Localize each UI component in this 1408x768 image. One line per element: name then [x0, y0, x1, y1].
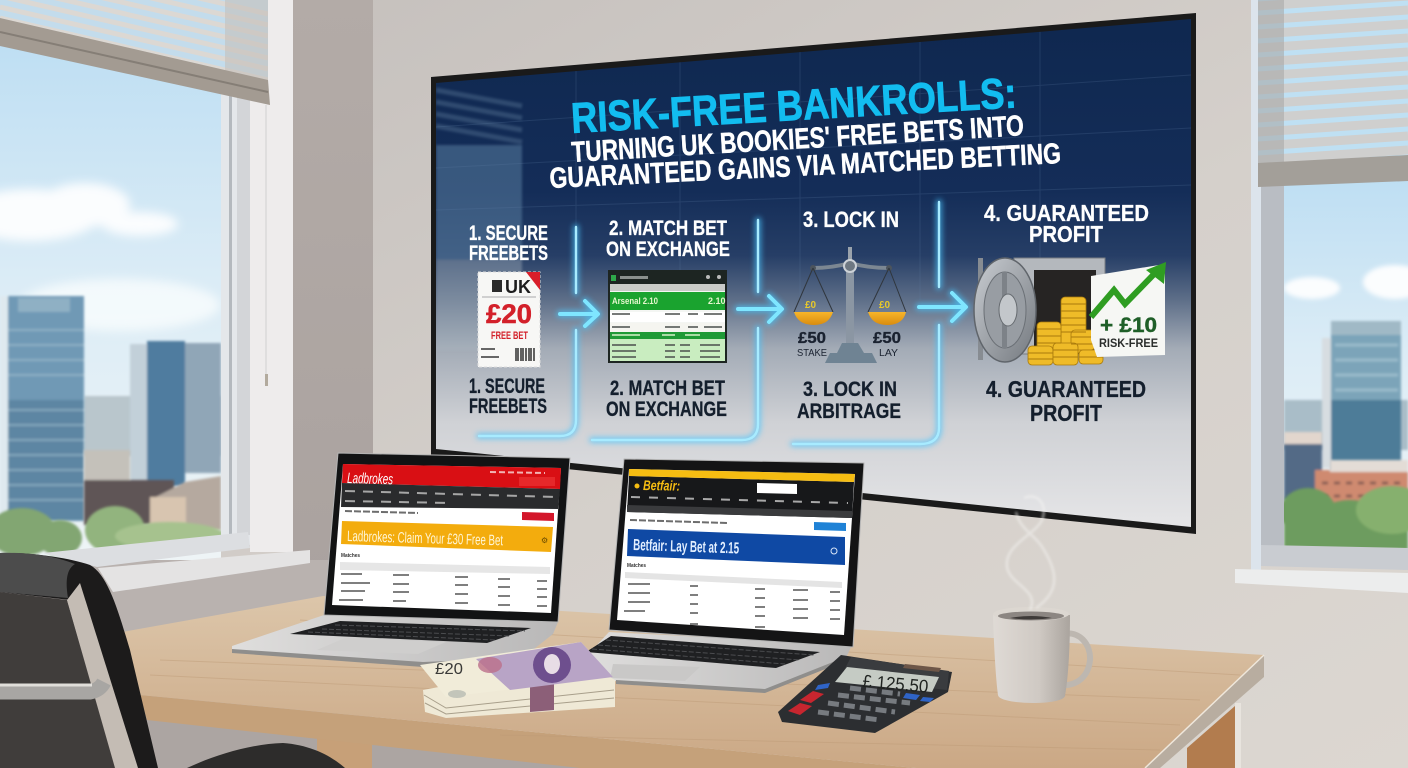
wall below left window: [0, 560, 372, 768]
icon: balance scale: £50: [873, 330, 901, 347]
left laptop: Ladbrokes: Claim Your £30 Free Bet: [347, 528, 504, 549]
icon: safe, coins and profit card: + £10: [1100, 314, 1157, 337]
left laptop: [232, 453, 570, 667]
icon: free bet ticket: £20: [486, 299, 532, 329]
glowing flow lines: [479, 202, 939, 444]
step 1 top label: [469, 222, 548, 265]
desk leg left: [317, 735, 372, 768]
wall screen: [431, 13, 1196, 534]
step 1 bottom label: 1. SECURE: [469, 375, 545, 398]
step 3 bottom label: ARBITRAGE: [797, 400, 901, 423]
clouds right: [1284, 265, 1408, 299]
desk: [100, 596, 1264, 768]
right window: [1251, 0, 1408, 572]
icon: balance scale: LAY: [879, 348, 898, 359]
icon: balance scale: £0: [805, 300, 817, 311]
trees left: [0, 506, 225, 556]
profit card: [1091, 264, 1165, 357]
frame right: [1251, 0, 1261, 572]
right laptop: Betfair:: [643, 477, 680, 494]
left window: [0, 0, 293, 567]
step 2 top label: ON EXCHANGE: [606, 238, 730, 261]
left blind: [0, 0, 270, 386]
keypad: [788, 683, 934, 720]
step 4 top label: [984, 200, 1149, 247]
right blind: [1258, 0, 1408, 187]
arrow 1: [560, 301, 598, 326]
icon: free bet ticket: [478, 272, 540, 367]
left laptop: Matches: [341, 553, 360, 559]
right tower: [130, 341, 221, 486]
hills right: [1284, 400, 1408, 450]
step 3 bottom label: [797, 378, 901, 423]
step 2 bottom label: [606, 377, 727, 421]
icon: exchange panel: [608, 270, 727, 363]
side wall panel: [293, 0, 373, 600]
icon: exchange panel: Arsenal 2.10: [612, 296, 658, 306]
icon: free bet ticket: UK: [505, 277, 531, 297]
left tower: [0, 296, 84, 521]
right laptop: Betfair: Lay Bet at 2.15: [633, 537, 739, 558]
icon: exchange panel: 2.10: [708, 296, 726, 306]
arrow 3: [919, 293, 966, 321]
step 4 top label: 4. GUARANTEED: [984, 200, 1149, 226]
step 4 bottom label: 4. GUARANTEED: [986, 376, 1146, 402]
coffee mug: [993, 607, 1090, 703]
title: GUARANTEED GAINS VIA MATCHED BETTING: [549, 138, 1062, 195]
icon: free bet ticket: FREE BET: [491, 330, 528, 342]
step 3 top label: 3. LOCK IN: [803, 207, 899, 232]
subtitle line 1: TURNING UK BOOKIES' FREE BETS INTO: [571, 110, 1025, 169]
arrow 2: [738, 296, 782, 322]
right laptop: [583, 459, 864, 693]
right tower: [1322, 321, 1401, 471]
step 2 top label: [606, 217, 730, 261]
window frame left: [221, 0, 250, 545]
banknote stack: £20: [435, 661, 463, 678]
icon: balance scale: [794, 247, 906, 363]
right laptop: Matches: [627, 563, 646, 569]
step 1 bottom label: [469, 375, 547, 418]
left window sill: [98, 550, 310, 592]
calculator: [778, 655, 952, 733]
step 2 bottom label: ON EXCHANGE: [606, 398, 727, 421]
cloud left: [0, 183, 220, 331]
office chair: [0, 553, 345, 768]
step 4 bottom label: [986, 376, 1146, 426]
distant hills: [84, 396, 221, 456]
low buildings: [84, 450, 221, 530]
coin stacks: [1028, 297, 1103, 365]
icon: balance scale: £0: [879, 300, 891, 311]
icon: balance scale: £50: [798, 330, 826, 347]
desk leg right: [1187, 706, 1235, 768]
step 2 top label: 2. MATCH BET: [609, 217, 727, 240]
icon: safe, coins and profit card: RISK-FREE: [1099, 336, 1158, 350]
left laptop: Ladbrokes: [347, 470, 394, 488]
steam: [1007, 497, 1054, 610]
step 1 top label: FREEBETS: [469, 242, 548, 265]
window reflection on screen: [436, 90, 522, 350]
icon: safe, coins and profit card: [974, 258, 1166, 365]
step 4 bottom label: PROFIT: [1030, 400, 1102, 426]
trees right: [1280, 486, 1408, 550]
step 4 top label: PROFIT: [1029, 221, 1103, 247]
keyboard deck: [232, 615, 558, 665]
step 2 bottom label: 2. MATCH BET: [610, 377, 725, 400]
title: [549, 69, 1062, 195]
wall shaded under desk: [140, 700, 620, 768]
step 3 bottom label: 3. LOCK IN: [803, 378, 897, 401]
step 1 bottom label: FREEBETS: [469, 395, 547, 418]
banknote stack: [420, 642, 615, 718]
left laptop: ⚙: [541, 536, 548, 545]
step 1 top label: 1. SECURE: [469, 222, 548, 245]
title: RISK-FREE BANKROLLS:: [570, 69, 1018, 143]
lid: [324, 453, 570, 622]
low buildings right: [1284, 430, 1408, 504]
icon: balance scale: STAKE: [797, 348, 827, 359]
calculator: £ 125.50: [862, 671, 929, 697]
right window sill: [1235, 569, 1408, 593]
